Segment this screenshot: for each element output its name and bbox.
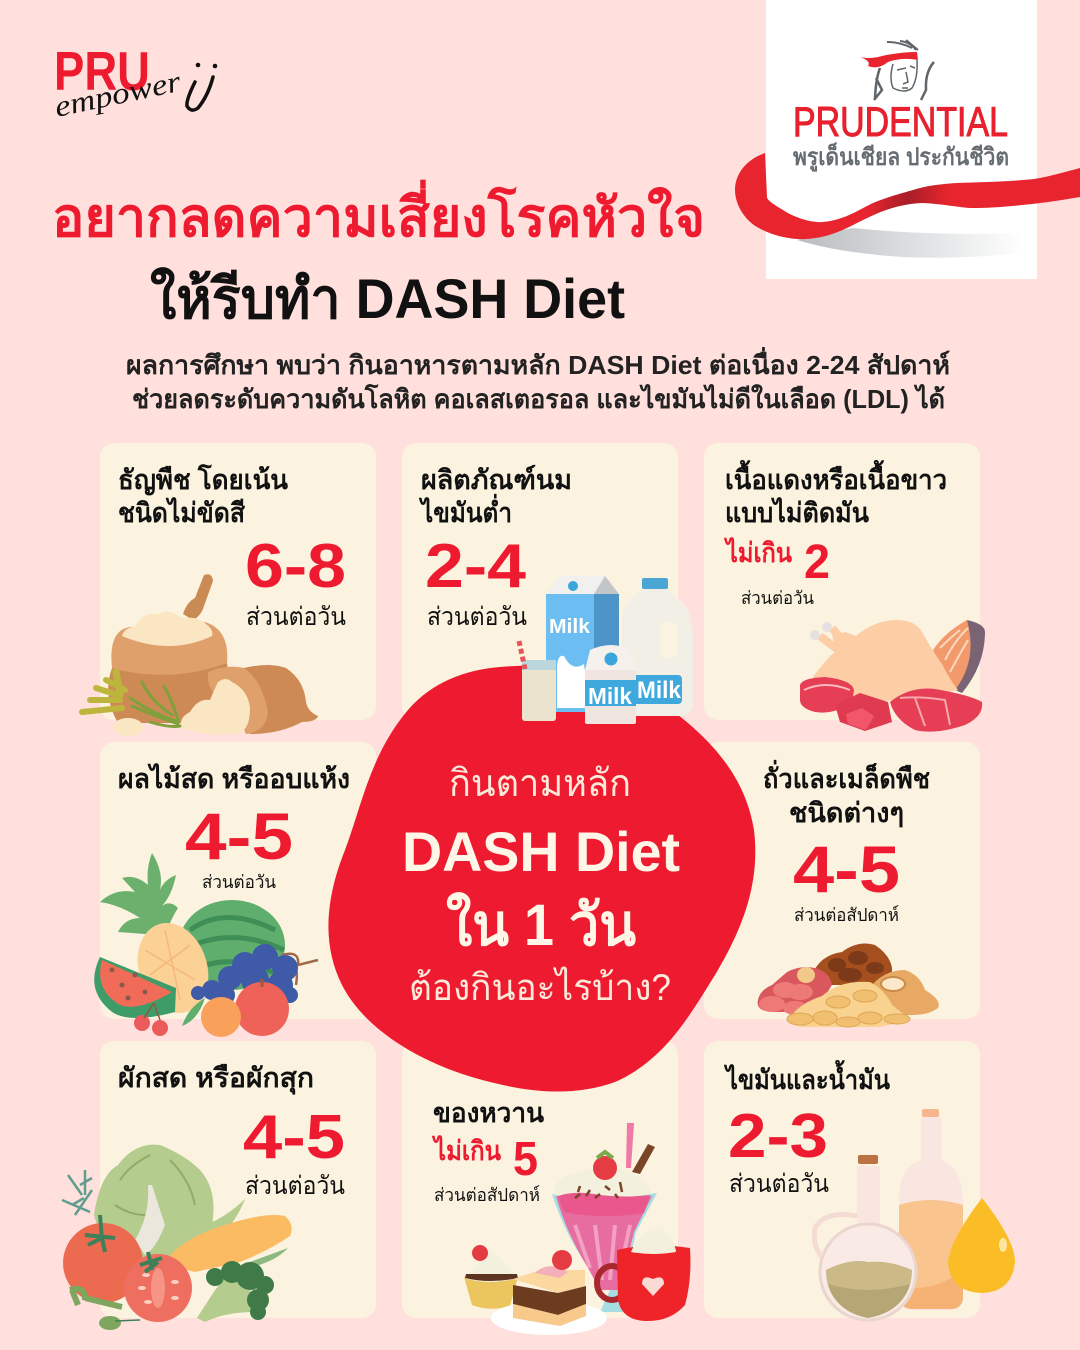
title: อยากลดความเสี่ยงโรคหัวใจ <box>52 179 705 248</box>
text: unit: ส่วนต่อวัน <box>741 588 814 608</box>
icon: milk containers <box>519 576 693 724</box>
panel: fats and oils: ไขมันและน้ำมัน <box>723 1059 890 1095</box>
text: blob line 4: ต้องกินอะไรบ้าง? <box>409 966 671 1008</box>
icon: milk containers: Milk <box>549 616 591 638</box>
panel: nuts and seeds <box>758 759 939 1027</box>
text: grains line 2: ชนิดไม่ขัดสี <box>118 497 245 528</box>
icon: fruits <box>94 853 318 1037</box>
icon: nuts pile <box>758 944 939 1027</box>
text: blob line 1: กินตามหลัก <box>449 763 631 805</box>
intro text <box>126 346 950 414</box>
text: not more than: ไม่เกิน <box>431 1135 501 1166</box>
text: unit: ส่วนต่อสัปดาห์ <box>794 905 899 925</box>
panel: whole grains: ธัญพืช โดยเน้น <box>118 463 289 496</box>
icon: milk containers: Milk <box>588 683 632 709</box>
panel: low-fat dairy <box>418 464 693 724</box>
icon: grain sacks <box>82 574 318 736</box>
panel: fats and oils <box>723 1059 1015 1320</box>
icon: vegetables <box>62 1145 292 1330</box>
text: PRUDENTIAL: PRUDENTIAL <box>793 98 1008 145</box>
number: 4-5: 4-5 <box>243 1103 345 1172</box>
number: 2-4: 2-4 <box>425 532 527 601</box>
panel: sweets: ของหวาน <box>433 1098 545 1128</box>
text: unit: ส่วนต่อวัน <box>246 603 346 631</box>
icon: milk containers: Milk <box>637 677 682 704</box>
icon: meat, chicken and salmon <box>800 620 985 732</box>
panel: lean meat: เนื้อแดงหรือเนื้อขาว <box>725 459 947 495</box>
panel: whole grains <box>82 463 346 736</box>
panel: vegetables: ผักสด หรือผักสุก <box>118 1063 314 1095</box>
text: unit: ส่วนต่อสัปดาห์ <box>434 1185 540 1205</box>
text: not more than: ไม่เกิน <box>723 537 792 568</box>
text: meat line 2: แบบไม่ติดมัน <box>725 497 869 528</box>
intro text: ผลการศึกษา พบว่า กินอาหารตามหลัก DASH Diet ต่อเนื่อง 2-24 สัปดาห์ <box>126 346 950 380</box>
icon: grey ribbon shadow <box>797 228 1023 258</box>
text: unit: ส่วนต่อวัน <box>427 603 527 631</box>
number: 4-5: 4-5 <box>793 832 900 906</box>
panel: fruit <box>94 763 350 1037</box>
text: empower script: empower <box>52 65 184 124</box>
logo: PRU empower <box>52 40 217 124</box>
icon: Prudence head <box>856 40 934 100</box>
logo: Prudential panel <box>735 0 1080 279</box>
text: nuts line 2: ชนิดต่างๆ <box>789 798 904 828</box>
icon: red ribbon <box>735 153 1080 239</box>
icon: smile <box>187 77 213 110</box>
panel: vegetables <box>62 1063 345 1330</box>
text: unit: ส่วนต่อวัน <box>202 872 276 892</box>
card backgrounds <box>100 443 980 1318</box>
panel: lean meat <box>723 459 985 732</box>
icon: desserts <box>464 1123 690 1335</box>
number: 2-3: 2-3 <box>728 1102 828 1171</box>
icon: oil bottles <box>814 1109 1015 1320</box>
text: blob line 2: DASH Diet <box>402 820 680 883</box>
panel: fruit: ผลไม้สด หรืออบแห้ง <box>118 763 350 794</box>
text: dairy line 2: ไขมันต่ำ <box>418 493 512 528</box>
panel: sweets <box>431 1098 690 1335</box>
title line 2: ให้รีบทำ DASH Diet <box>150 266 625 330</box>
title <box>52 179 705 330</box>
text: Thai company name: พรูเด็นเชียล ประกันชีวิต <box>793 142 1009 172</box>
intro line 2: ช่วยลดระดับความดันโลหิต คอเลสเตอรอล และไขมันไม่ดีในเลือด (LDL) ได้ <box>132 383 945 414</box>
panel: low-fat dairy: ผลิตภัณฑ์นม <box>421 464 572 495</box>
text: unit: ส่วนต่อวัน <box>729 1170 829 1198</box>
text: blob line 3: ใน 1 วัน <box>446 891 636 958</box>
number: 4-5: 4-5 <box>185 799 293 873</box>
centre red blob <box>328 666 755 1092</box>
number: 5: 5 <box>513 1133 538 1186</box>
number: 2: 2 <box>804 536 830 589</box>
panel: nuts and seeds: ถั่วและเมล็ดพืช <box>763 759 930 794</box>
logo: PRU empower: PRU <box>54 40 150 102</box>
text: unit: ส่วนต่อวัน <box>245 1172 345 1200</box>
number: 6-8: 6-8 <box>245 532 346 601</box>
